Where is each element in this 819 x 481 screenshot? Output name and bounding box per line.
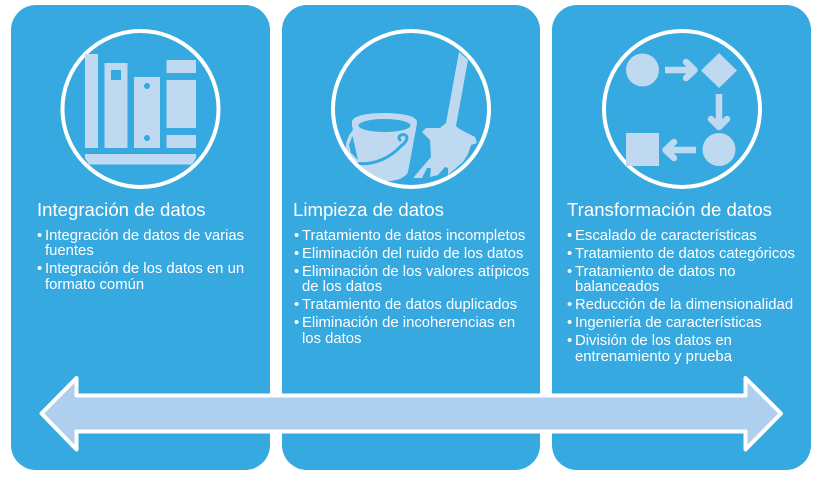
list: transformación: Tratamiento de datos categóricos bbox=[575, 246, 795, 262]
list: integración bbox=[38, 228, 244, 292]
icon: bucket and mop bbox=[333, 31, 489, 187]
list: transformación: Ingeniería de características bbox=[575, 315, 762, 331]
list: integración: Integración de datos de varias fuentes bbox=[45, 228, 244, 259]
icon part: bucket bbox=[346, 113, 417, 181]
list: transformación: Escalado de características bbox=[575, 228, 757, 244]
list: transformación bbox=[568, 228, 795, 364]
list: transformación: Tratamiento de datos no balanceados bbox=[575, 264, 736, 295]
list: limpieza: Tratamiento de datos duplicados bbox=[302, 297, 517, 313]
list: limpieza: Eliminación de incoherencias en los datos bbox=[302, 315, 515, 346]
list: integración: Integración de los datos en un formato común bbox=[45, 261, 244, 292]
list: transformación: División de los datos en entrenamiento y prueba bbox=[575, 333, 732, 364]
heading: Limpieza de datos: Limpieza de datos bbox=[293, 199, 444, 220]
arrow: double-headed arrow bbox=[42, 378, 781, 450]
panel: integración background bbox=[11, 5, 270, 470]
list: transformación: Reducción de la dimensionalidad bbox=[575, 297, 793, 313]
list: limpieza bbox=[294, 228, 529, 346]
panel: transformación background bbox=[552, 5, 811, 470]
icon part: bucket handle gap bbox=[349, 136, 358, 160]
icon: process flow of shapes bbox=[604, 31, 760, 187]
icon part: mop bbox=[413, 52, 477, 178]
list: limpieza: Tratamiento de datos incompletos bbox=[302, 228, 525, 244]
list: limpieza: Eliminación del ruido de los datos bbox=[302, 246, 523, 262]
list: limpieza: Eliminación de los valores atípicos de los datos bbox=[302, 264, 529, 295]
panel: limpieza background bbox=[282, 5, 540, 470]
icon: books on a shelf bbox=[62, 31, 218, 187]
icon part: bucket opening bbox=[358, 119, 410, 132]
icon part: bucket handle bbox=[359, 134, 407, 164]
heading: Integración de datos: Integración de datos bbox=[37, 199, 206, 220]
heading: Transformación de datos: Transformación de datos bbox=[567, 199, 772, 220]
